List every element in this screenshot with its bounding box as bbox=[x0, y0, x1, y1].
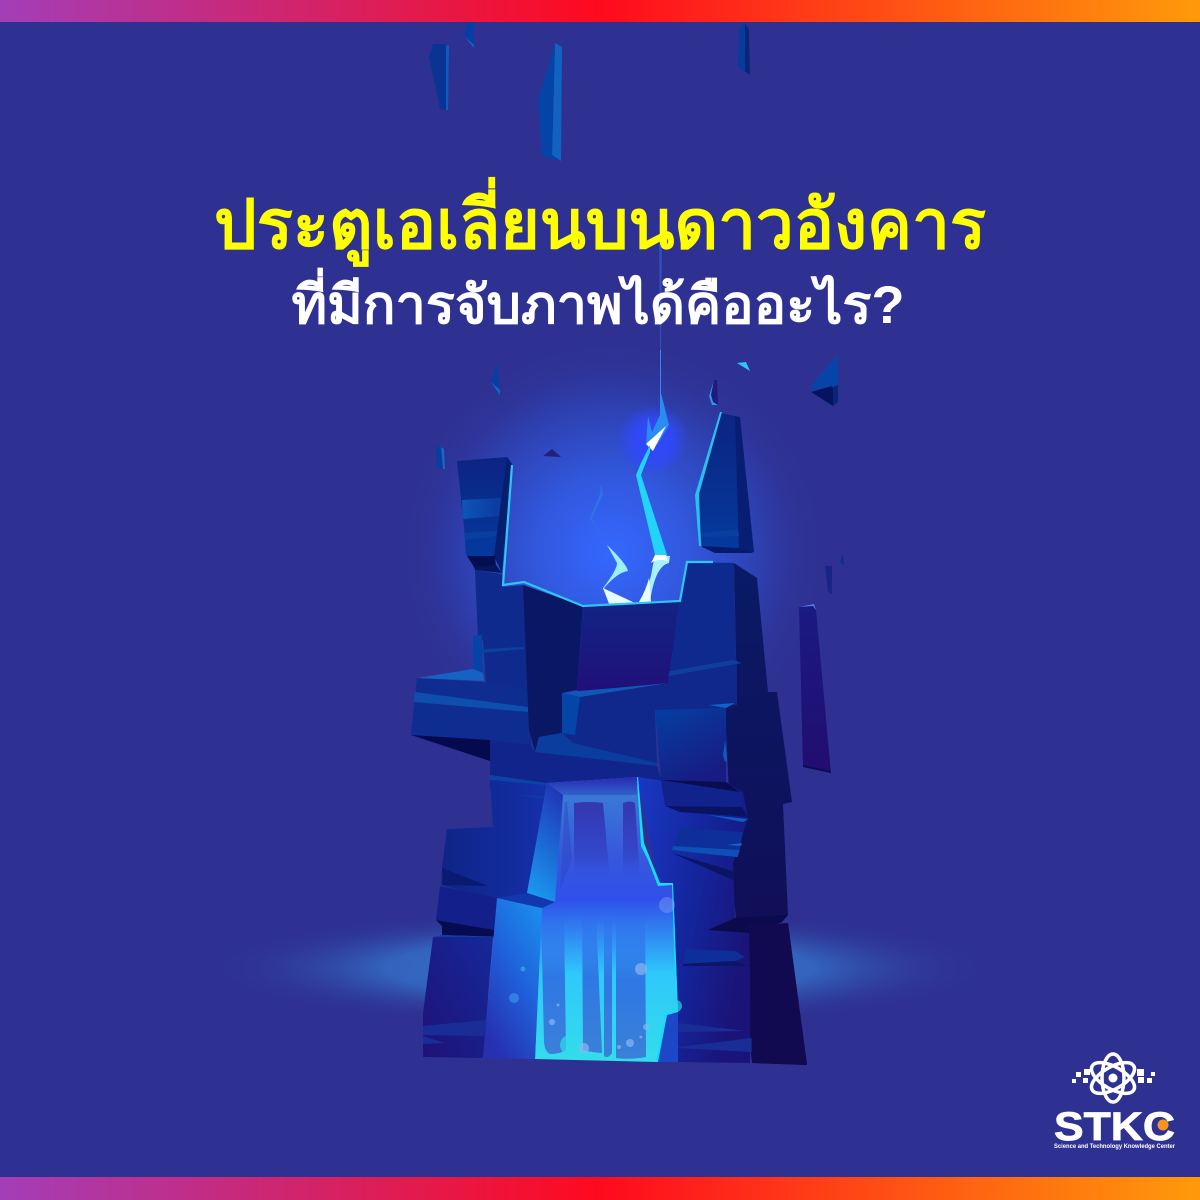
tall right pillar bbox=[799, 604, 831, 773]
title line 1: ประตูเอเลี่ยนบนดาวอังคาร bbox=[214, 176, 986, 268]
logo: STKC bbox=[1054, 1054, 1176, 1150]
falling rock shards at top bbox=[429, 22, 750, 161]
lower left blocks bbox=[436, 886, 498, 930]
rock tower bbox=[411, 562, 807, 1065]
box block bbox=[655, 708, 726, 783]
bubbles bbox=[509, 897, 682, 1055]
tagline: Science and Technology Knowledge Center bbox=[1054, 1144, 1176, 1150]
title line 2: ที่มีการจับภาพได้คืออะไร? bbox=[292, 267, 904, 335]
right dark column bbox=[725, 563, 807, 1065]
glow at top of lightning bbox=[617, 404, 689, 476]
icon: atom bbox=[1087, 1054, 1139, 1102]
lower dark columns bbox=[541, 915, 566, 1054]
wordmark: STKC bbox=[1054, 1105, 1175, 1149]
middle ledge bbox=[562, 660, 737, 765]
lightning bolts bbox=[590, 240, 670, 605]
cyan edge bbox=[637, 777, 678, 1062]
icon: pixel squares bbox=[1072, 1069, 1155, 1083]
lower body band bbox=[490, 740, 662, 790]
ledge over slab bbox=[497, 893, 555, 908]
top gradient bar bbox=[0, 0, 1200, 22]
central inner face bbox=[577, 601, 680, 691]
upper right floating rock bbox=[695, 412, 754, 553]
upper left floating rock bbox=[457, 457, 512, 573]
floor glow bbox=[210, 910, 990, 1026]
bottom gradient bar bbox=[0, 1177, 1200, 1200]
portal bbox=[483, 777, 682, 1062]
left column bbox=[475, 570, 532, 760]
floating shards mid bbox=[436, 355, 844, 594]
cyan rim of the open cavity bbox=[503, 465, 713, 606]
orange dot bbox=[1158, 1120, 1168, 1130]
lower right facet bbox=[658, 1012, 678, 1062]
large background glow bbox=[397, 337, 827, 767]
right dark lower bbox=[749, 923, 807, 1065]
left ledge bbox=[411, 678, 530, 745]
portal frame bbox=[527, 777, 678, 1062]
dark central column bbox=[523, 585, 583, 752]
left slab bbox=[483, 898, 542, 1059]
left mid body bbox=[441, 780, 547, 900]
right front face bbox=[660, 562, 737, 712]
right mid body bbox=[637, 777, 750, 1063]
upper dark window panes bbox=[560, 802, 572, 890]
